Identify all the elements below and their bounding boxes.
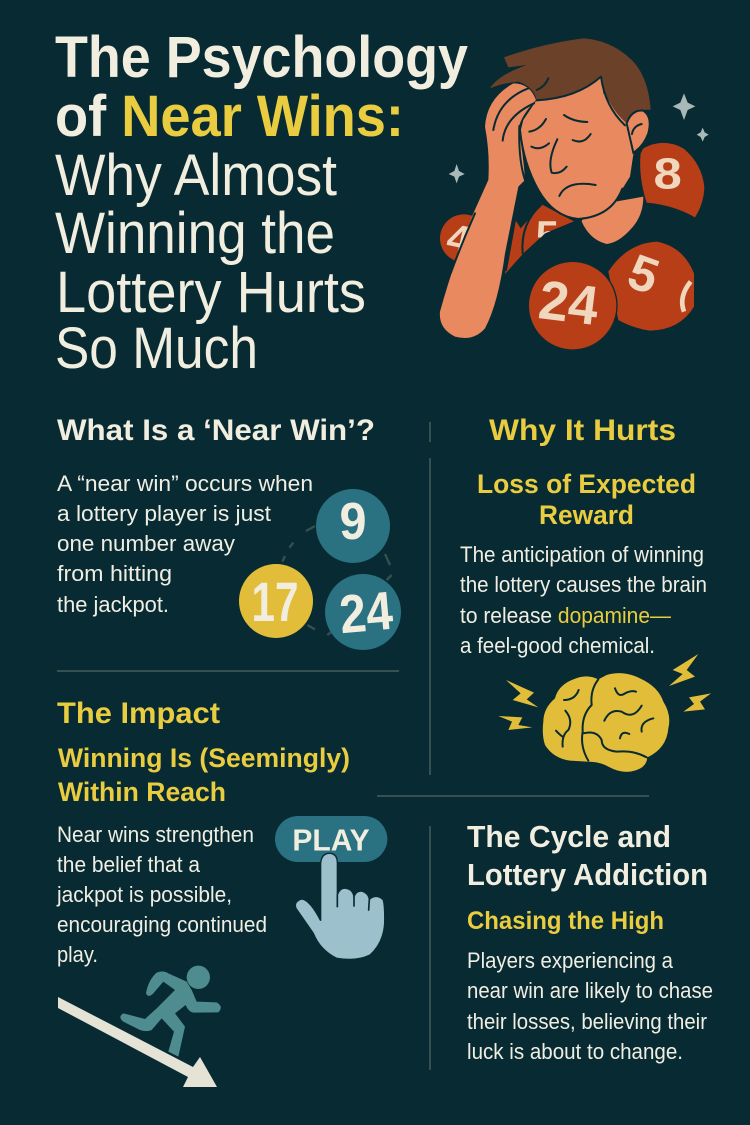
- text block: play.: [57, 942, 98, 967]
- text block: a lottery player is just: [57, 501, 272, 526]
- icon: running figure: [120, 966, 221, 1057]
- text block: one number away: [57, 531, 236, 556]
- text block: [460, 542, 707, 658]
- ball: 5: [608, 242, 694, 331]
- panel: the cycle and lottery addiction: [467, 819, 713, 1064]
- chart: lottery number balls: 9: [340, 493, 366, 551]
- face: [520, 77, 634, 219]
- text block: near win are likely to chase: [467, 978, 713, 1003]
- subheading: Chasing the High: [467, 907, 664, 935]
- title: [55, 25, 468, 381]
- ball: 4: [440, 214, 488, 264]
- icon: play button with pointing hand: [275, 816, 387, 959]
- text block: Near wins strengthen: [57, 822, 254, 847]
- panel: the impact: [56, 697, 387, 1087]
- title: Lottery Hurts: [56, 260, 366, 325]
- ball: 24: 24: [536, 268, 602, 337]
- panel: what is a near win: [57, 414, 401, 650]
- text block: jackpot is possible,: [56, 882, 232, 907]
- text block: their losses, believing their: [467, 1009, 707, 1034]
- arm and hand: [440, 83, 536, 338]
- ball: 5: 5: [621, 243, 666, 305]
- neck: [582, 197, 643, 244]
- icon: play button with pointing hand: PLAY: [292, 824, 370, 858]
- text block: The anticipation of winning: [460, 542, 704, 567]
- sparkles: [449, 93, 709, 183]
- text block: [57, 471, 313, 617]
- subheading: [58, 743, 350, 807]
- heading: Lottery Addiction: [467, 857, 708, 892]
- chart: lottery number balls: 17: [252, 570, 298, 633]
- subheading: Loss of Expected: [477, 469, 696, 499]
- heading: The Cycle and: [467, 819, 671, 854]
- title: Winning the: [55, 201, 335, 266]
- heading: What Is a ‘Near Win’?: [57, 414, 375, 447]
- panel: why it hurts: [460, 414, 711, 772]
- text block: A “near win” occurs when: [57, 471, 313, 496]
- subheading: [477, 469, 696, 530]
- subheading: Reward: [539, 500, 634, 530]
- heading: Why It Hurts: [489, 414, 676, 447]
- ball: partial 5: 5: [536, 212, 559, 259]
- ball: 4: 4: [443, 216, 475, 264]
- text block: luck is about to change.: [467, 1039, 683, 1064]
- text block: a feel-good chemical.: [460, 633, 655, 658]
- heading: [467, 819, 708, 892]
- ball: 8: 8: [653, 149, 682, 198]
- text block: [56, 822, 267, 967]
- heading: The Impact: [57, 697, 220, 730]
- text block: [467, 948, 713, 1064]
- title: of Near Wins:: [55, 84, 404, 149]
- chart: lottery number balls: 24: [337, 581, 395, 645]
- illustration: distressed man with lottery balls: [440, 38, 709, 351]
- subheading: Winning Is (Seemingly): [58, 743, 350, 773]
- arrow: downward trend: [58, 997, 217, 1087]
- hair: [490, 38, 651, 123]
- text block: the jackpot.: [57, 592, 169, 617]
- text block: to release dopamine—: [460, 603, 671, 628]
- title: So Much: [55, 316, 258, 381]
- subheading: Within Reach: [58, 777, 226, 807]
- text block: encouraging continued: [57, 912, 267, 937]
- text block: from hitting: [57, 561, 172, 586]
- text block: the belief that a: [57, 852, 200, 877]
- chart: lottery number balls: [239, 489, 401, 650]
- text block: the lottery causes the brain: [460, 572, 707, 597]
- ball: 24: [528, 261, 618, 351]
- title: Why Almost: [55, 143, 337, 208]
- icon: brain: [498, 654, 711, 772]
- text block: Players experiencing a: [467, 948, 673, 973]
- ball: partial 5: [505, 204, 583, 287]
- title: The Psychology: [55, 25, 468, 90]
- ball: 8: [640, 143, 704, 217]
- facial features: [529, 115, 596, 196]
- ear: [627, 111, 650, 153]
